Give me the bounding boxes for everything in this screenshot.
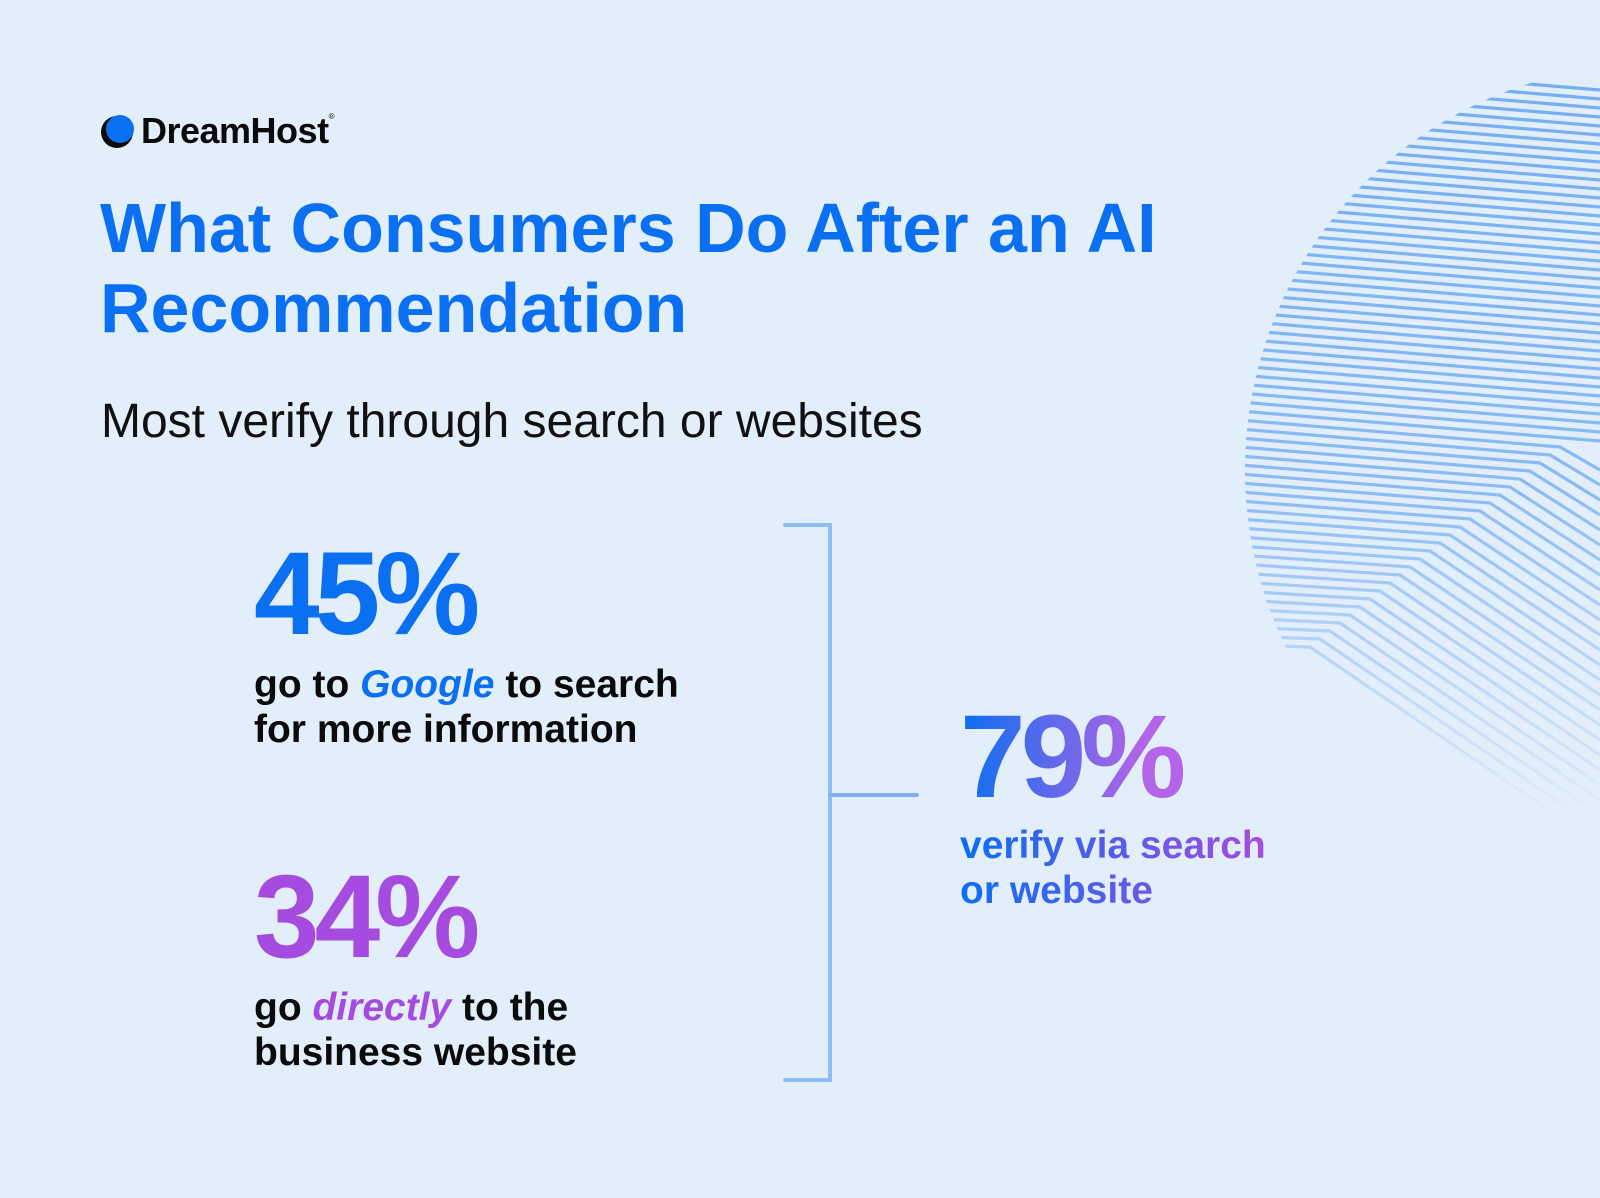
stat: 34%: business website xyxy=(254,1031,577,1074)
stat: 34%: 34% xyxy=(254,851,475,983)
subtitle: Most verify through search or websites xyxy=(101,395,923,448)
stat: 79% xyxy=(960,691,1266,912)
stat: 45%: go to Google to search xyxy=(254,663,679,706)
logo: DreamHost: DreamHost® xyxy=(141,110,334,151)
title: What Consumers Do After an AI xyxy=(100,189,1157,267)
title: Recommendation xyxy=(100,269,687,347)
decorative line pattern xyxy=(1245,82,1600,790)
stat: 45% xyxy=(254,528,679,751)
stat: 34%: go directly to the xyxy=(254,986,568,1029)
title xyxy=(100,189,1157,347)
stat: 45%: 45% xyxy=(254,528,475,660)
stat: 79%: or website xyxy=(960,869,1153,912)
stat: 45%: for more information xyxy=(254,708,638,751)
stat: 79%: verify via search xyxy=(960,824,1266,867)
stat: 79%: 79% xyxy=(960,691,1181,823)
bracket connector xyxy=(783,523,919,1082)
icon: moon logo xyxy=(101,115,134,148)
stat: 34% xyxy=(254,851,577,1074)
